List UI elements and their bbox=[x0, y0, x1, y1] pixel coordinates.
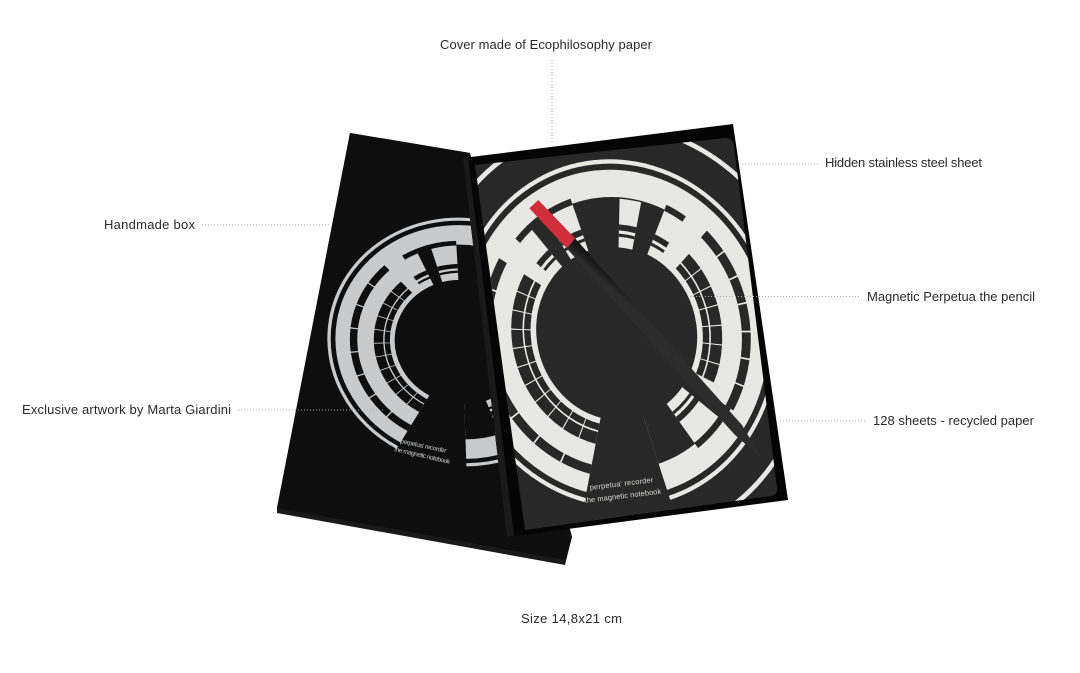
lid artwork: ring graphic bbox=[327, 218, 498, 466]
cover caption: the magnetic notebook bbox=[584, 487, 662, 505]
label: size: Size 14,8x21 cm bbox=[521, 611, 622, 626]
cover caption: perpetua' recorder bbox=[589, 475, 654, 492]
label: magnetic Perpetua the pencil: Magnetic Perpetua the pencil bbox=[867, 289, 1035, 304]
label: handmade box: Handmade box bbox=[104, 217, 196, 232]
label: 128 sheets recycled paper: 128 sheets - recycled paper bbox=[873, 413, 1035, 428]
label: hidden stainless steel sheet: Hidden stainless steel sheet bbox=[825, 155, 982, 170]
lid caption bbox=[394, 438, 451, 466]
icon: Perpetua pencil bbox=[529, 200, 762, 458]
panel: tray with notebook bbox=[463, 124, 788, 537]
lid caption: perpetua' recorder bbox=[400, 438, 448, 455]
lid caption: the magnetic notebook bbox=[394, 446, 451, 466]
notebook cover bbox=[475, 138, 777, 530]
label: exclusive artwork: Exclusive artwork by Marta Giardini bbox=[22, 402, 231, 417]
label: cover made of Ecophilosophy paper: Cover made of Ecophilosophy paper bbox=[440, 37, 653, 52]
panel: handmade box lid bbox=[277, 133, 572, 565]
cover artwork: ring graphic bbox=[476, 142, 774, 502]
cover caption bbox=[584, 475, 662, 505]
